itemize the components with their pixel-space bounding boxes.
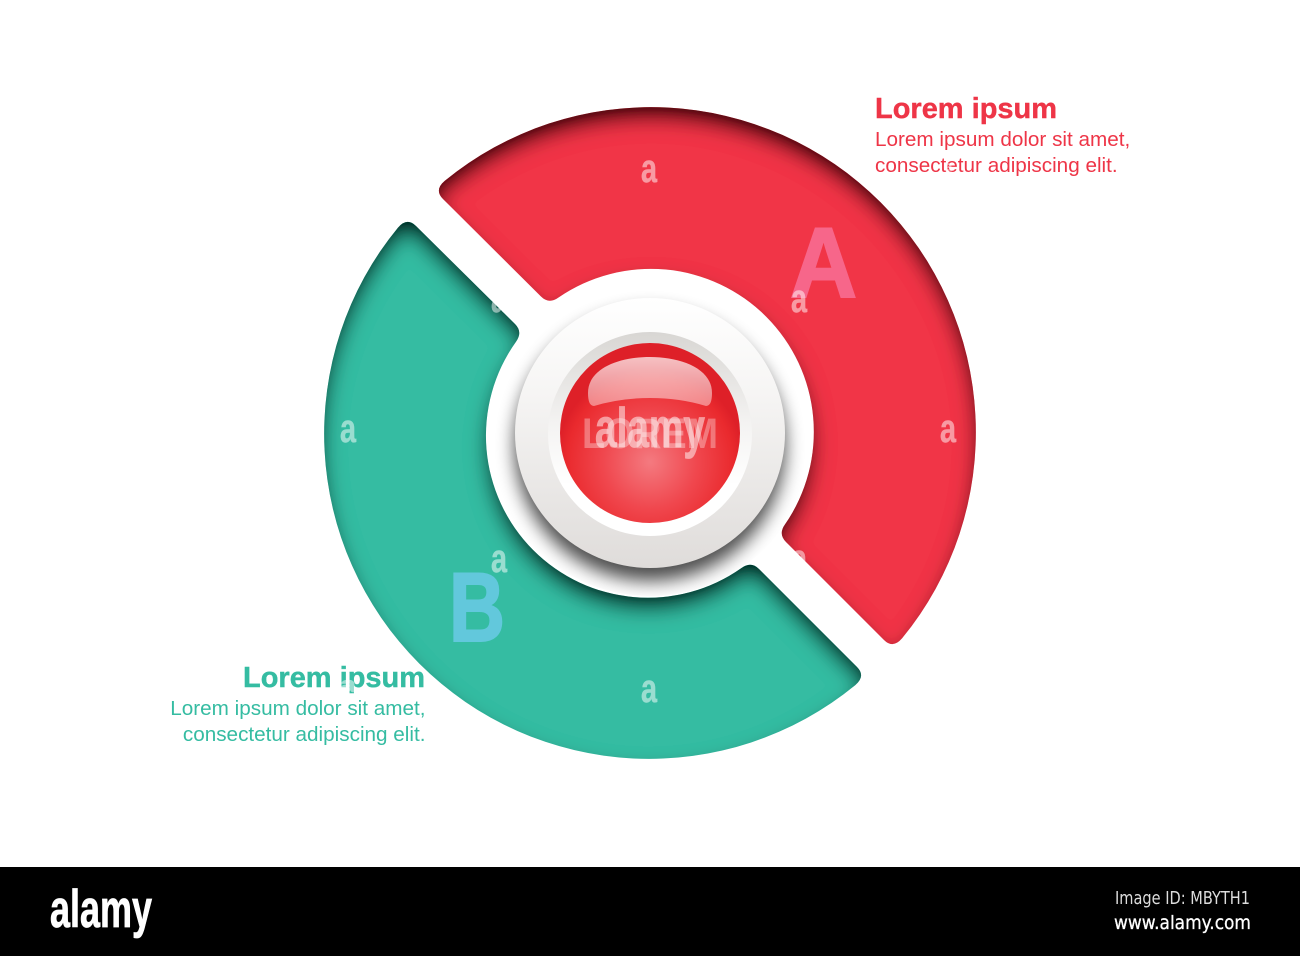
watermark marks: a <box>340 672 357 697</box>
button highlight <box>588 357 712 406</box>
center watermark: alamy <box>595 396 705 459</box>
body A: consectetur adipiscing elit. <box>875 154 1118 177</box>
hub outer disc <box>515 298 785 568</box>
big letter B: B <box>449 552 505 662</box>
heading A: Lorem ipsum <box>875 93 1057 125</box>
watermark marks: a <box>491 277 508 321</box>
watermark marks <box>340 147 957 711</box>
watermark marks: a <box>940 407 957 451</box>
website: www.alamy.com <box>1114 912 1251 934</box>
footer bar <box>0 867 1300 956</box>
watermark marks: a <box>641 667 658 711</box>
text block A <box>875 93 1130 177</box>
watermark marks: a <box>791 277 808 321</box>
body B: Lorem ipsum dolor sit amet, <box>170 697 426 720</box>
heading B: Lorem ipsum <box>243 662 425 694</box>
center hub <box>515 298 785 581</box>
watermark marks: a <box>945 158 952 174</box>
red glossy button <box>560 343 740 523</box>
segment B: green ring section <box>324 222 861 759</box>
center label: LOREM <box>582 410 718 458</box>
image id: Image ID: MBYTH1 <box>1115 888 1250 909</box>
segment A: red ring section <box>439 107 976 644</box>
hub inner ring <box>548 332 752 536</box>
text block B <box>170 662 426 746</box>
hub disc shadow <box>515 311 785 581</box>
watermark marks: a <box>340 407 357 451</box>
body A: Lorem ipsum dolor sit amet, <box>875 128 1130 151</box>
big letter A: A <box>790 207 857 318</box>
watermark marks: a <box>491 537 508 581</box>
watermark marks: a <box>791 537 808 581</box>
footer logo: alamy <box>50 880 152 939</box>
watermark marks: a <box>641 147 658 191</box>
body B: consectetur adipiscing elit. <box>183 723 426 746</box>
